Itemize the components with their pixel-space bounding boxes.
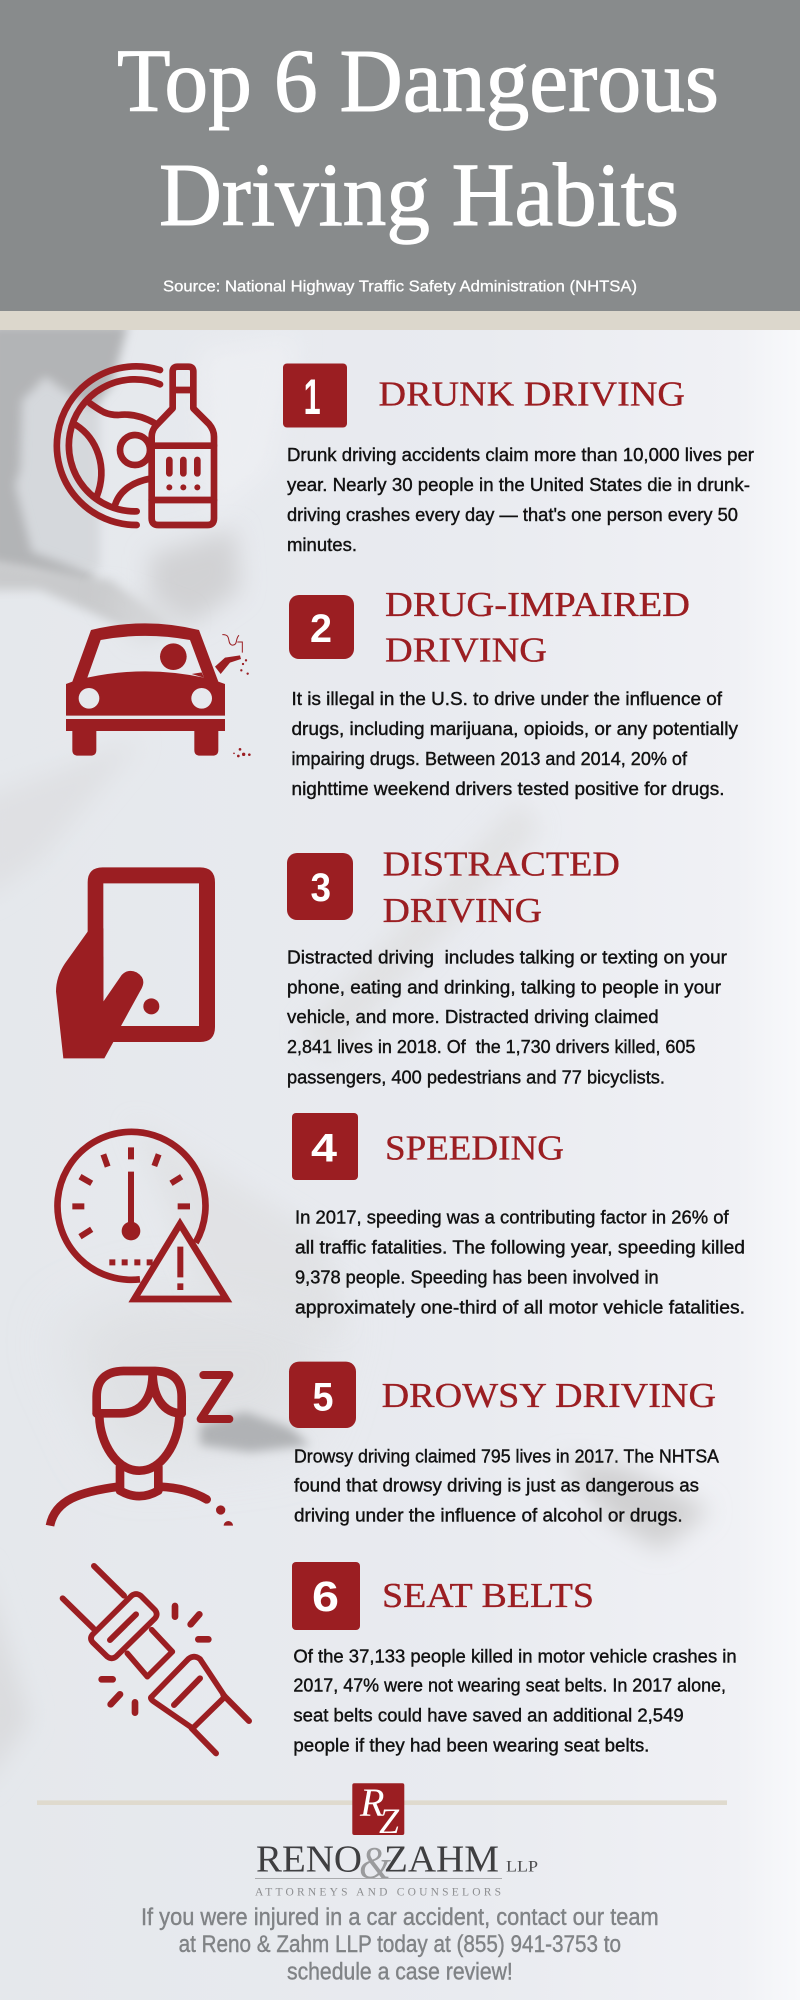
heading: SEAT BELTS: [382, 1576, 594, 1615]
heading: DRIVING: [383, 891, 542, 930]
logo mark RZ: Z: [379, 1801, 400, 1841]
icon: steering wheel and bottle: [57, 366, 214, 525]
body text: [295, 1207, 745, 1317]
footer divider: [37, 1800, 727, 1805]
body text: driving under the influence of alcohol or drugs.: [294, 1504, 683, 1525]
call to action: [141, 1904, 659, 1986]
wordmark: LLP: [506, 1859, 538, 1876]
icon: car with bottle: [66, 623, 251, 757]
logo mark RZ: [352, 1780, 404, 1841]
icon: hand holding phone: [56, 867, 215, 1058]
logo: Reno & Zahm LLP: [255, 1780, 538, 1899]
icon: speedometer with warning triangle: [57, 1132, 226, 1299]
heading: DISTRACTED: [383, 844, 620, 883]
panel: seat belts: [63, 1562, 737, 1755]
icon: drowsy person: [50, 1371, 233, 1526]
body text: Drunk driving accidents claim more than 10,000 lives per: [287, 444, 754, 465]
heading: SPEEDING: [385, 1128, 564, 1167]
source line: Source: National Highway Traffic Safety Administration (NHTSA): [163, 278, 637, 296]
body text: 2017, 47% were not wearing seat belts. In 2017 alone,: [293, 1674, 726, 1696]
number badge 6: [292, 1562, 360, 1630]
body text: [292, 688, 739, 799]
number badge 6: 6: [312, 1573, 339, 1621]
body text: people if they had been wearing seat belts.: [293, 1734, 649, 1755]
number badge 4: 4: [311, 1127, 338, 1171]
body text: Distracted driving includes talking or texting on your: [287, 946, 727, 967]
title: Driving Habits: [159, 146, 679, 245]
beige strip: [0, 311, 800, 330]
body text: 9,378 people. Speeding has been involved in: [295, 1266, 659, 1288]
number badge 5: 5: [312, 1376, 334, 1420]
heading: DRIVING: [385, 631, 547, 670]
panel: distracted driving: [56, 844, 727, 1088]
body text: approximately one-third of all motor vehicle fatalities.: [295, 1296, 745, 1317]
number badge 5: [289, 1362, 356, 1428]
number badge 2: [289, 595, 354, 659]
number badge 1: [283, 364, 347, 428]
body text: all traffic fatalities. The following year, speeding killed: [295, 1237, 745, 1258]
wordmark: RENO: [256, 1839, 362, 1881]
number badge 4: [292, 1113, 358, 1180]
number badge 3: [287, 853, 353, 920]
number badge 2: 2: [310, 607, 332, 651]
body text: phone, eating and drinking, talking to people in your: [287, 976, 721, 997]
panel: drunk driving: [57, 364, 754, 555]
header panel: [0, 0, 800, 311]
body text: minutes.: [287, 534, 357, 555]
number badge 3: 3: [310, 866, 331, 910]
body text: 2,841 lives in 2018. Of the 1,730 drivers killed, 605: [287, 1036, 695, 1057]
wordmark: &: [359, 1837, 391, 1888]
body text: driving crashes every day — that's one person every 50: [287, 504, 738, 525]
body text: impairing drugs. Between 2013 and 2014, 20% of: [292, 748, 688, 769]
logo mark RZ: R: [359, 1780, 384, 1825]
body text: [293, 1646, 737, 1755]
body text: [294, 1446, 720, 1525]
wordmark: [255, 1837, 538, 1899]
panel: speeding: [57, 1113, 745, 1317]
body text: In 2017, speeding was a contributing factor in 26% of: [295, 1207, 729, 1228]
body text: passengers, 400 pedestrians and 77 bicyclists.: [287, 1066, 665, 1088]
call to action: at Reno & Zahm LLP today at (855) 941-3753 to: [179, 1931, 621, 1958]
heading: DRUG-IMPAIRED: [385, 585, 690, 624]
icon: seat belt buckle: [63, 1566, 249, 1753]
body text: vehicle, and more. Distracted driving claimed: [287, 1006, 659, 1027]
body text: seat belts could have saved an additional 2,549: [293, 1704, 684, 1725]
call to action: If you were injured in a car accident, contact our team: [141, 1904, 659, 1931]
title: [117, 32, 719, 245]
heading: [385, 585, 690, 670]
wordmark: ZAHM: [384, 1839, 499, 1881]
body text: [287, 946, 727, 1088]
body text: year. Nearly 30 people in the United States die in drunk-: [287, 474, 750, 495]
wordmark: ATTORNEYS AND COUNSELORS: [255, 1887, 501, 1899]
panel: drowsy driving: [50, 1362, 720, 1526]
body text: nighttime weekend drivers tested positive for drugs.: [292, 778, 724, 799]
body text: drugs, including marijuana, opioids, or any potentially: [292, 718, 739, 739]
panel: drug-impaired driving: [66, 585, 739, 799]
title: Top 6 Dangerous: [117, 32, 719, 131]
body text: found that drowsy driving is just as dangerous as: [294, 1474, 699, 1496]
number badge 1: 1: [304, 369, 321, 425]
body text: [287, 444, 754, 555]
body text: Drowsy driving claimed 795 lives in 2017. The NHTSA: [294, 1446, 720, 1466]
heading: DROWSY DRIVING: [382, 1376, 716, 1415]
body text: It is illegal in the U.S. to drive under the influence of: [292, 688, 723, 709]
call to action: schedule a case review!: [287, 1958, 513, 1986]
heading: [383, 844, 620, 930]
body text: Of the 37,133 people killed in motor vehicle crashes in: [293, 1646, 737, 1666]
heading: DRUNK DRIVING: [378, 375, 685, 414]
